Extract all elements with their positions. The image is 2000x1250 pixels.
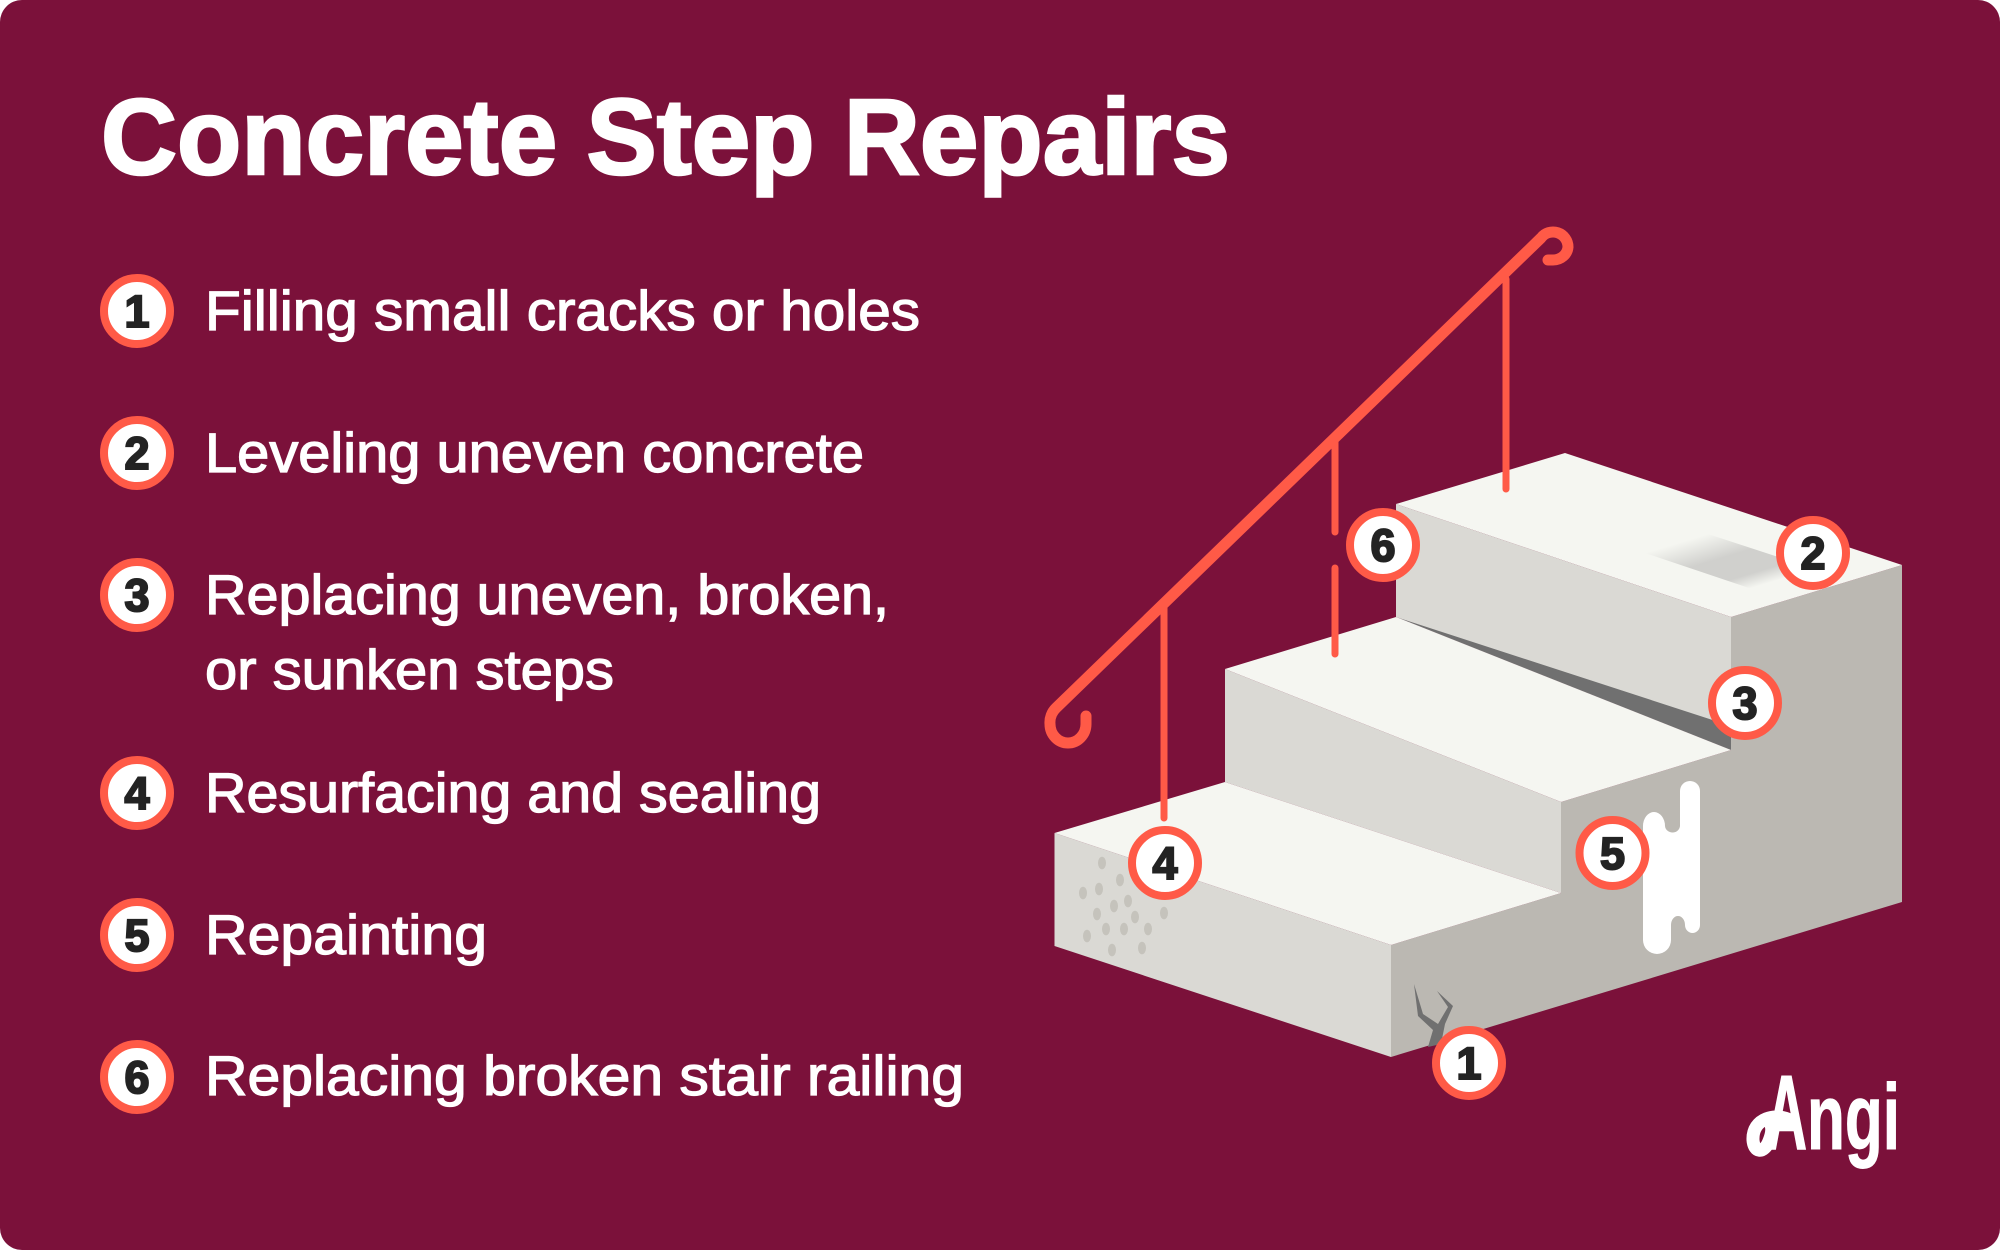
list item 1: 1 (124, 286, 150, 337)
list item 3: or sunken steps (205, 638, 614, 701)
list item 2: 2 (124, 428, 150, 479)
bottom riser (1054, 833, 1391, 1057)
list item 6: 6 (124, 1052, 150, 1103)
callout badge 3 (1712, 670, 1778, 736)
handrail with hooks (1050, 232, 1568, 743)
list item 4: 4 (124, 768, 150, 819)
list item 1: Filling small cracks or holes (205, 279, 920, 342)
callout badge 3: 3 (1732, 678, 1758, 729)
list item 3 (104, 562, 889, 701)
uneven concrete patch (1645, 534, 1812, 589)
callout badge 6 (1350, 512, 1416, 578)
railing posts (1164, 279, 1506, 818)
Angi logo: ngi (1807, 1065, 1900, 1169)
callout badge 2 (1780, 520, 1846, 586)
list item 6: Replacing broken stair railing (205, 1044, 964, 1107)
callout badge 6: 6 (1370, 520, 1396, 571)
middle tread (1225, 617, 1731, 802)
staircase illustration (1054, 453, 1902, 1057)
list item 4: Resurfacing and sealing (205, 761, 821, 824)
list item 5 (104, 902, 487, 968)
list item 2: Leveling uneven concrete (205, 421, 864, 484)
top tread (1396, 453, 1902, 617)
logo swash (1753, 1117, 1792, 1150)
white paint drip (1643, 781, 1700, 954)
list item 5: Repainting (205, 903, 487, 966)
top riser (1396, 504, 1731, 750)
stair side wall (1391, 565, 1902, 1057)
list item 5: 5 (124, 910, 150, 961)
stair railing (1050, 232, 1568, 818)
resurfacing speckles (1079, 857, 1168, 956)
Angi logo (1753, 1054, 1900, 1172)
callout badge 5: 5 (1600, 828, 1625, 879)
logo wordmark: A (1766, 1054, 1807, 1172)
callout badge 1 (1436, 1030, 1502, 1096)
bottom tread (1054, 782, 1561, 945)
callout badge 1: 1 (1456, 1038, 1482, 1089)
callout badge 4: 4 (1152, 838, 1178, 889)
gap shadow under top step (1396, 617, 1731, 750)
numbered list (104, 278, 964, 1110)
list item 3: 3 (124, 570, 150, 621)
middle riser (1225, 669, 1561, 893)
list item 3: Replacing uneven, broken, (205, 563, 889, 626)
callout badge 2: 2 (1800, 528, 1826, 579)
title: Concrete Step Repairs (101, 76, 1230, 197)
callout badge 4 (1132, 830, 1198, 896)
callout badge 5 (1580, 820, 1646, 886)
crack (1414, 984, 1453, 1047)
